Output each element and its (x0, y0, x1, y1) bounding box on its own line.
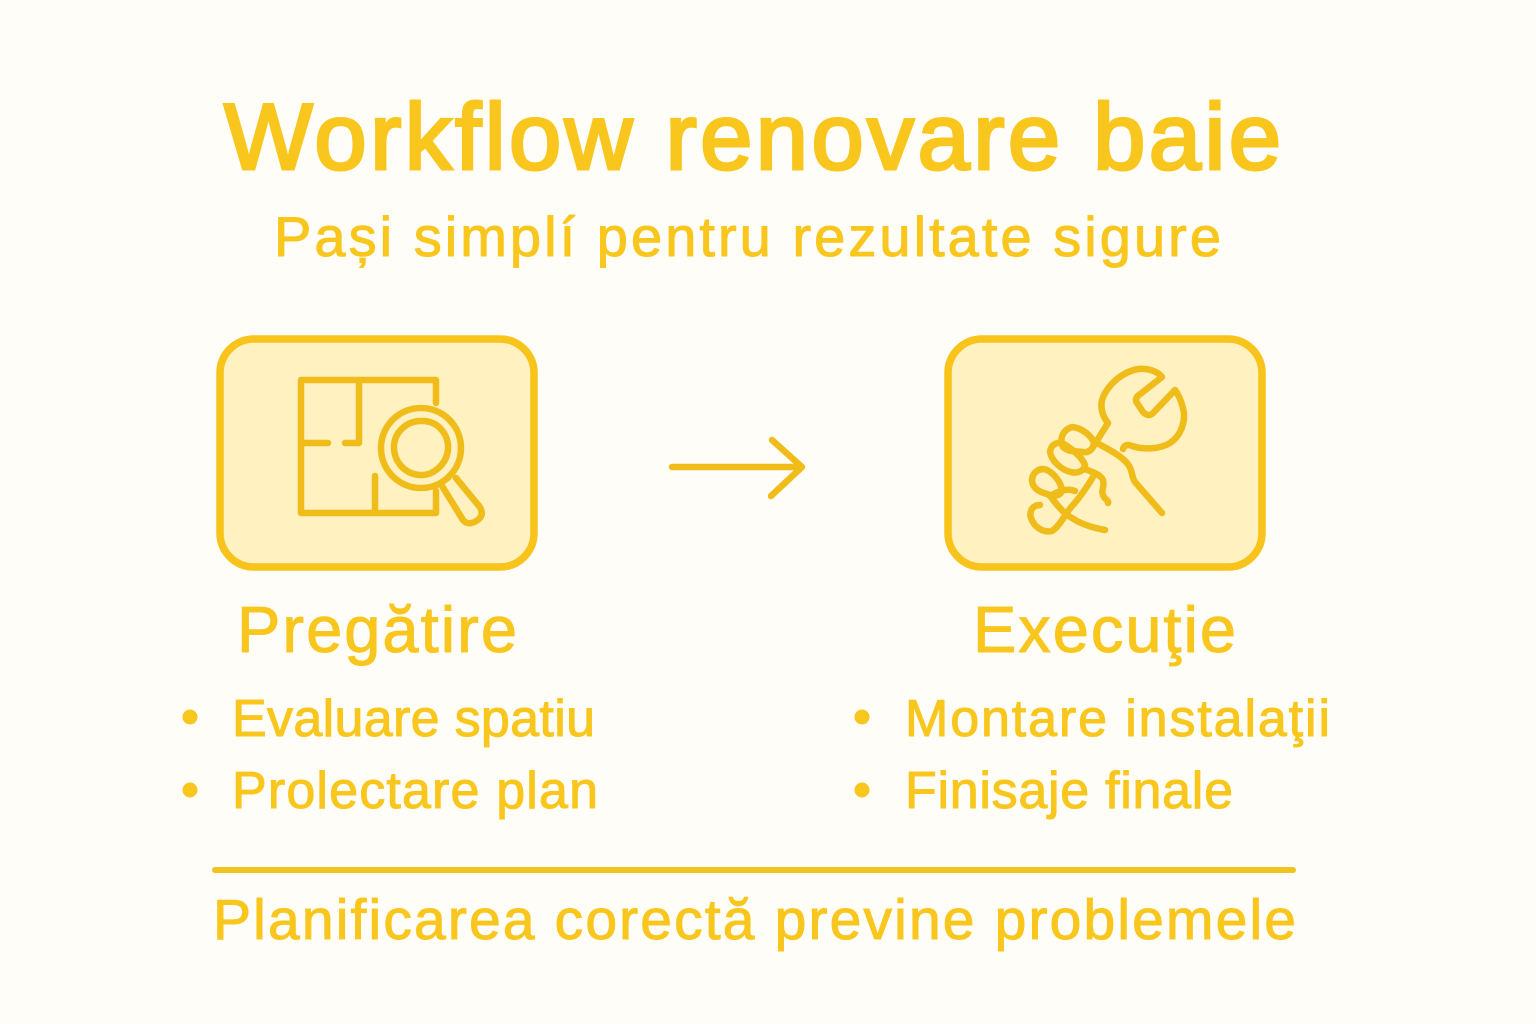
icon: magnifying glass (381, 408, 482, 523)
icon: floor plan (301, 380, 436, 513)
icon: hand (1030, 427, 1162, 531)
list: Pregătire (182, 690, 598, 820)
list: Execuție: Montare instalaţii (905, 690, 1330, 748)
title: Workflow renovare baie (224, 84, 1281, 189)
subtitle: Pași simplí pentru rezultate sigure (274, 205, 1221, 268)
heading: Pregătire: Pregătire (237, 593, 517, 666)
divider line (212, 867, 1296, 873)
heading: Execuție: Execuţie (973, 593, 1236, 666)
footer message: Planificarea corectă previne problemele (213, 888, 1296, 952)
panel: Execuție icon card (948, 339, 1262, 567)
icon: wrench (1093, 369, 1184, 449)
list: Pregătire: Prolectare plan (232, 762, 598, 820)
arrow (672, 440, 802, 496)
panel: Pregătire icon card (220, 339, 534, 567)
list: Execuție (854, 690, 1330, 820)
list: Pregătire: Evaluare spatiu (232, 690, 595, 748)
list: Execuție: Finisaje finale (905, 762, 1233, 820)
